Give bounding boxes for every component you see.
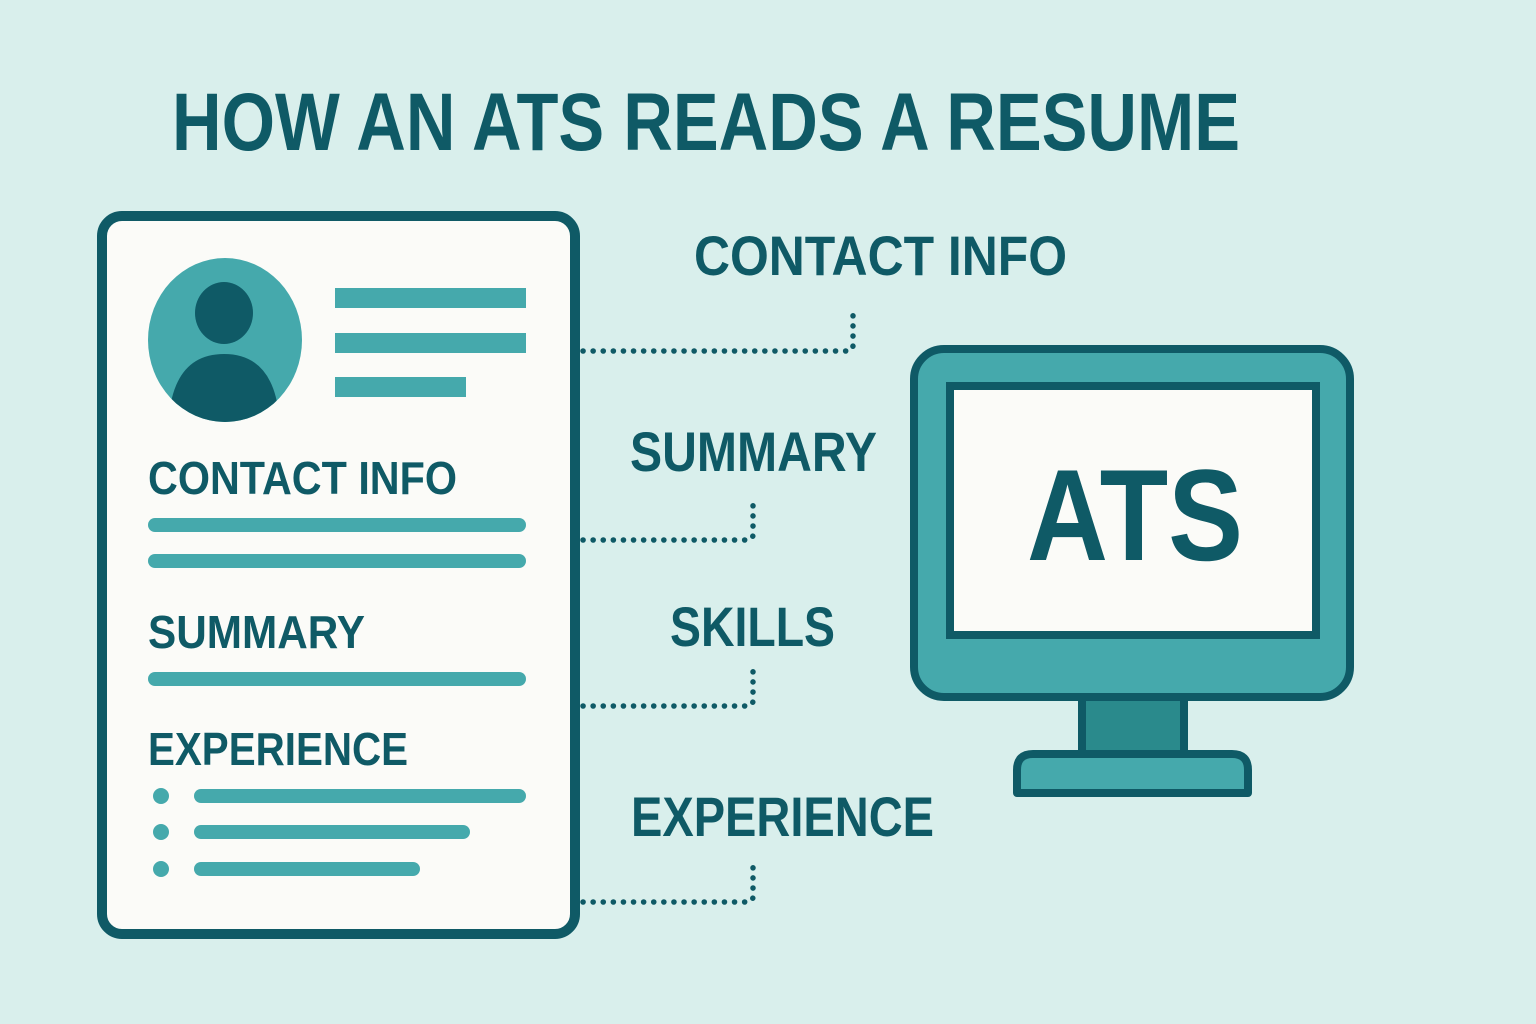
label: summary: SUMMARY <box>630 420 877 483</box>
panel: resume document <box>102 216 575 934</box>
resume heading: summary: SUMMARY <box>148 606 365 658</box>
resume heading: experience: EXPERIENCE <box>148 723 408 775</box>
label: contact info: CONTACT INFO <box>694 224 1067 287</box>
experience bullets <box>153 788 526 877</box>
header lines <box>335 288 526 397</box>
summary line <box>148 672 526 686</box>
resume heading: contact info: CONTACT INFO <box>148 452 457 504</box>
icon: avatar <box>148 258 302 430</box>
label: experience: EXPERIENCE <box>631 785 934 848</box>
contact lines <box>148 518 526 568</box>
title: HOW AN ATS READS A RESUME <box>172 77 1240 168</box>
icon: ATS monitor: ATS <box>1027 442 1243 588</box>
dotted connectors <box>583 310 853 902</box>
icon: ATS monitor <box>914 349 1350 793</box>
label: skills: SKILLS <box>670 595 835 658</box>
